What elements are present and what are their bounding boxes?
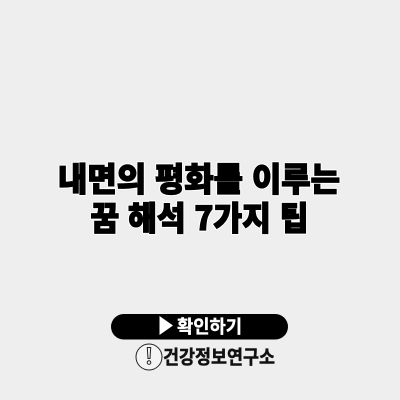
icon: exclamation circle (136, 344, 162, 370)
title: 꿈 해석 7가지 팁 (90, 192, 308, 240)
title: 내면의 평화를 이루는 (58, 153, 340, 201)
icon: play triangle (160, 316, 173, 335)
source label (136, 342, 275, 370)
title: 내면의 평화를 이루는 (58, 153, 340, 201)
title (58, 153, 340, 240)
button: confirm (111, 313, 288, 340)
source text: 건강정보연구소 (163, 342, 275, 370)
title: 꿈 해석 7가지 팁 (90, 192, 308, 240)
button label: 확인하기 (177, 313, 242, 339)
